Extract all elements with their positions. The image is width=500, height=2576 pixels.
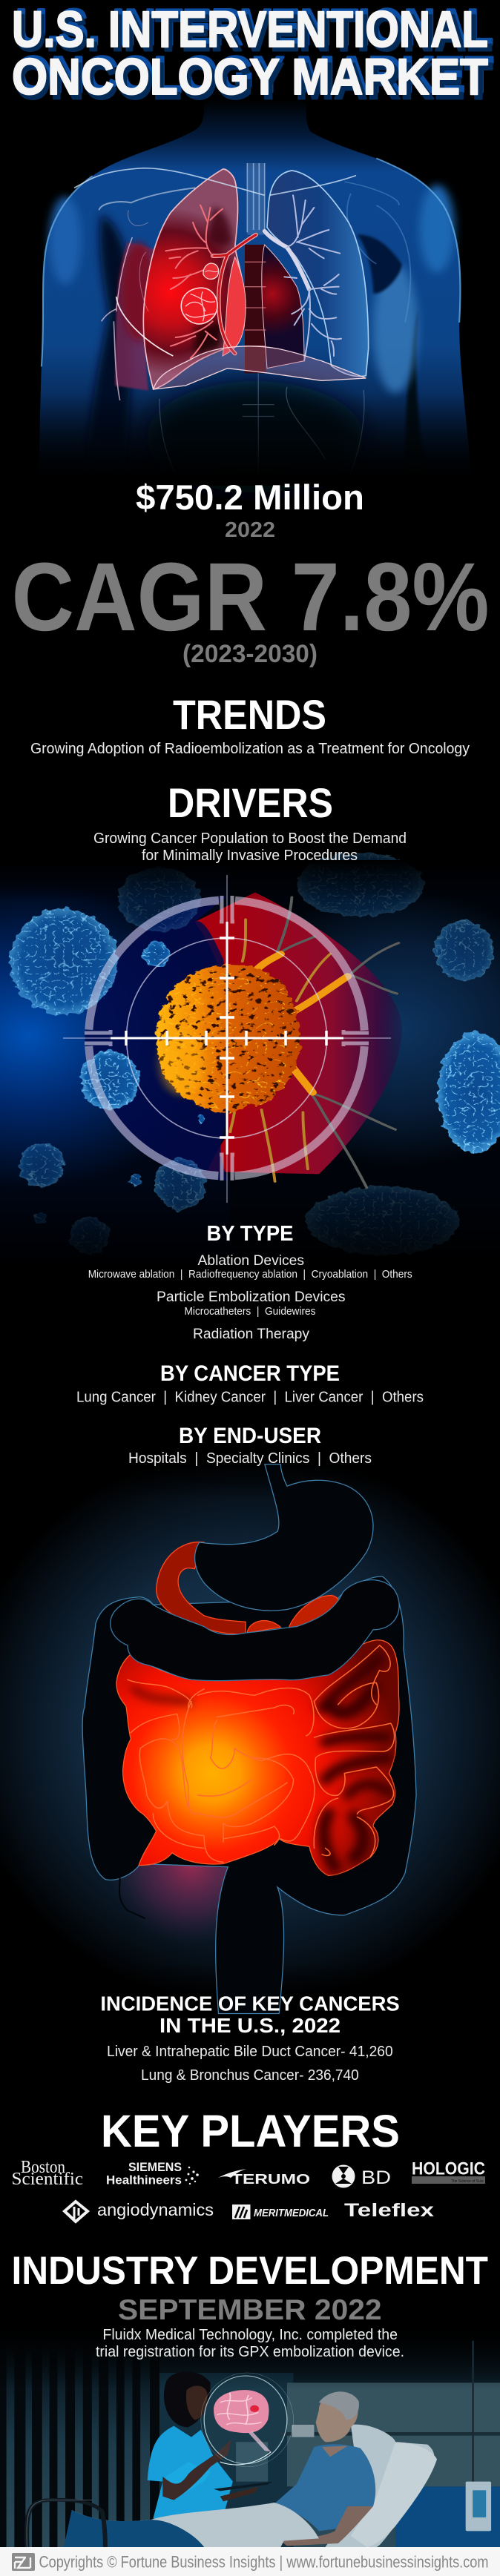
footer <box>0 2547 500 2576</box>
logo: Boston Scientific: Boston <box>21 2158 65 2177</box>
particle embolization devices: Particle Embolization Devices <box>157 1289 346 1305</box>
illustration: glowing intestines <box>0 1458 500 2013</box>
stomach <box>195 1464 373 1611</box>
hologram and brain <box>201 2373 294 2482</box>
logo: Merit Medical: MERITMEDICAL <box>254 2207 329 2219</box>
particle sub-types: Microcatheters | Guidewires <box>184 1306 316 1318</box>
logo: Siemens Healthineers <box>106 2160 199 2187</box>
heading: key players: KEY PLAYERS <box>101 2106 400 2156</box>
section: incidence of key cancers <box>100 1992 400 2084</box>
incidence figures: Lung & Bronchus Cancer- 236,740 <box>141 2067 359 2084</box>
trends text: Growing Adoption of Radioembolization as a Treatment for Oncology <box>30 741 470 757</box>
small intestine <box>116 1640 399 1875</box>
heading: drivers: DRIVERS <box>168 779 333 826</box>
development date: SEPTEMBER 2022 <box>118 2294 382 2326</box>
logo: Terumo <box>218 2169 310 2187</box>
drivers text <box>93 830 407 864</box>
drivers text: for Minimally Invasive Procedures <box>142 848 358 864</box>
heading: trends: TRENDS <box>173 691 326 738</box>
bronchi right <box>265 195 341 361</box>
footer logo <box>12 2553 35 2571</box>
patient <box>246 2391 437 2547</box>
logo: Teleflex: Teleflex <box>344 2200 434 2221</box>
lungs detail <box>74 163 369 400</box>
end-user list: Hospitals | Specialty Clinics | Others <box>128 1450 372 1467</box>
drivers text: Growing Cancer Population to Boost the Demand <box>93 830 407 847</box>
forecast period: (2023-2030) <box>182 640 318 668</box>
section: by type <box>88 1222 412 1342</box>
background blue cells <box>10 853 500 1255</box>
transverse colon <box>111 1580 399 1681</box>
cancer type list: Lung Cancer | Kidney Cancer | Liver Cancer | Others <box>76 1390 424 1406</box>
crosshair <box>63 875 391 1203</box>
duodenum <box>157 1542 246 1634</box>
red lung <box>143 169 246 389</box>
logo: Boston Scientific <box>12 2158 83 2189</box>
heading: by cancer type: BY CANCER TYPE <box>160 1361 340 1386</box>
heading: by type: BY TYPE <box>206 1222 294 1246</box>
heading: by end-user: BY END-USER <box>179 1424 321 1448</box>
logo: Merit Medical <box>232 2205 329 2219</box>
market size year: 2022 <box>225 518 275 542</box>
section: industry development <box>12 2249 488 2360</box>
incidence heading <box>100 1992 400 2037</box>
title <box>12 0 493 110</box>
ablation devices: Ablation Devices <box>197 1252 304 1269</box>
logo: Hologic: HOLOGIC <box>412 2159 485 2179</box>
radiation therapy: Radiation Therapy <box>193 1326 309 1342</box>
ablation sub-types: Microwave ablation | Radiofrequency ablation | Cryoablation | Others <box>88 1269 412 1281</box>
monitor on right <box>466 2482 491 2531</box>
market size value: $750.2 Million <box>136 478 364 517</box>
incidence figures: Liver & Intrahepatic Bile Duct Cancer- 41,260 <box>107 2044 393 2060</box>
illustration: targeted cancer cell <box>0 853 500 1281</box>
logo: AngioDynamics: angiodynamics <box>97 2200 214 2219</box>
logo: Siemens Healthineers: SIEMENS <box>128 2160 182 2174</box>
lung tumours <box>181 263 219 324</box>
development text: trial registration for its GPX embolization device. <box>96 2344 404 2360</box>
logo: BD: BD <box>361 2167 391 2188</box>
diaphragm and ribs <box>154 346 366 389</box>
tumour body <box>157 965 300 1112</box>
key player logos <box>12 2158 485 2222</box>
incidence heading: INCIDENCE OF KEY CANCERS <box>100 1992 400 2015</box>
development text <box>96 2327 404 2360</box>
bed blanket <box>27 2500 319 2547</box>
tumour tendrils <box>230 897 398 1188</box>
illustration: human torso with lungs and tumour <box>39 99 472 492</box>
incidence heading: IN THE U.S., 2022 <box>159 2014 341 2037</box>
bronchi left <box>165 205 256 358</box>
logo: Terumo: TERUMO <box>231 2172 310 2187</box>
wall slats <box>0 2343 159 2547</box>
tablet <box>214 2482 273 2491</box>
logo: Boston Scientific: Scientific <box>12 2170 83 2189</box>
incidence figures <box>107 2044 393 2084</box>
colon ring <box>82 1576 416 2013</box>
development text: Fluidx Medical Technology, Inc. completed the <box>102 2327 398 2343</box>
illustration: nurse showing hologram to patient <box>0 2323 500 2547</box>
logo: BD <box>332 2165 391 2188</box>
logo: AngioDynamics <box>65 2200 214 2222</box>
logo: Hologic: The Science of Sure <box>451 2179 484 2184</box>
nurse <box>148 2371 258 2519</box>
logo: Siemens Healthineers: Healthineers <box>106 2173 182 2187</box>
blue lung <box>267 171 369 377</box>
